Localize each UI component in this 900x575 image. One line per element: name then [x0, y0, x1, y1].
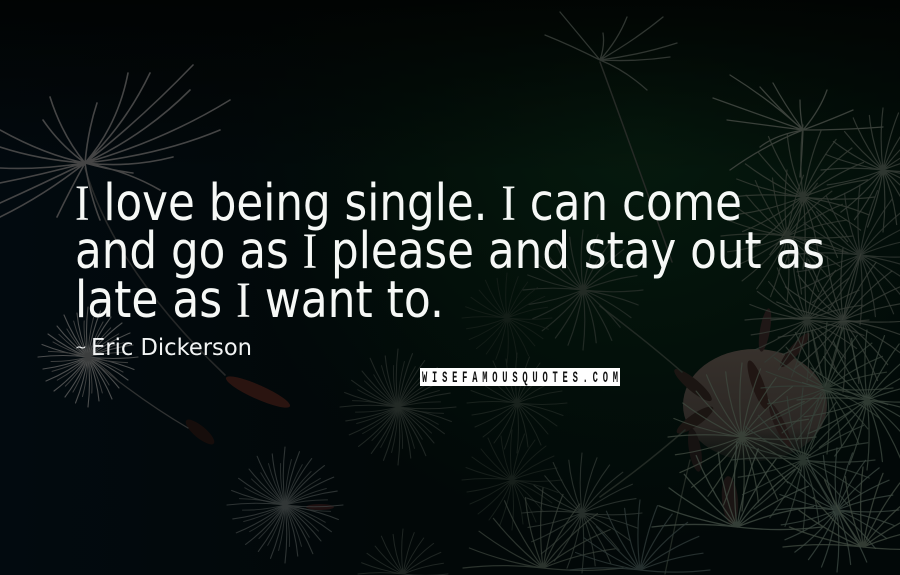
brown seeds [182, 307, 813, 525]
burst: top left [0, 65, 230, 220]
dandelion seed burst: lower left [38, 307, 138, 407]
watermark badge: WISEFAMOUSQUOTES.COM [422, 368, 618, 387]
quote line 2: and go as I please and stay out as [75, 222, 825, 281]
quote text [75, 174, 825, 330]
dandelion seed bursts: centre [227, 230, 643, 575]
pale dandelion seed head [683, 349, 827, 461]
quote line 1: I love being single. I can come [75, 174, 742, 233]
author attribution: ~ [75, 340, 87, 356]
burst: upper right head [713, 75, 883, 177]
dandelion seed bursts: right cluster [570, 108, 900, 572]
author attribution: Eric Dickerson [91, 335, 252, 361]
seed stems [85, 62, 690, 574]
burst: top centre [545, 12, 677, 90]
quote line 3: late as I want to. [75, 271, 444, 330]
